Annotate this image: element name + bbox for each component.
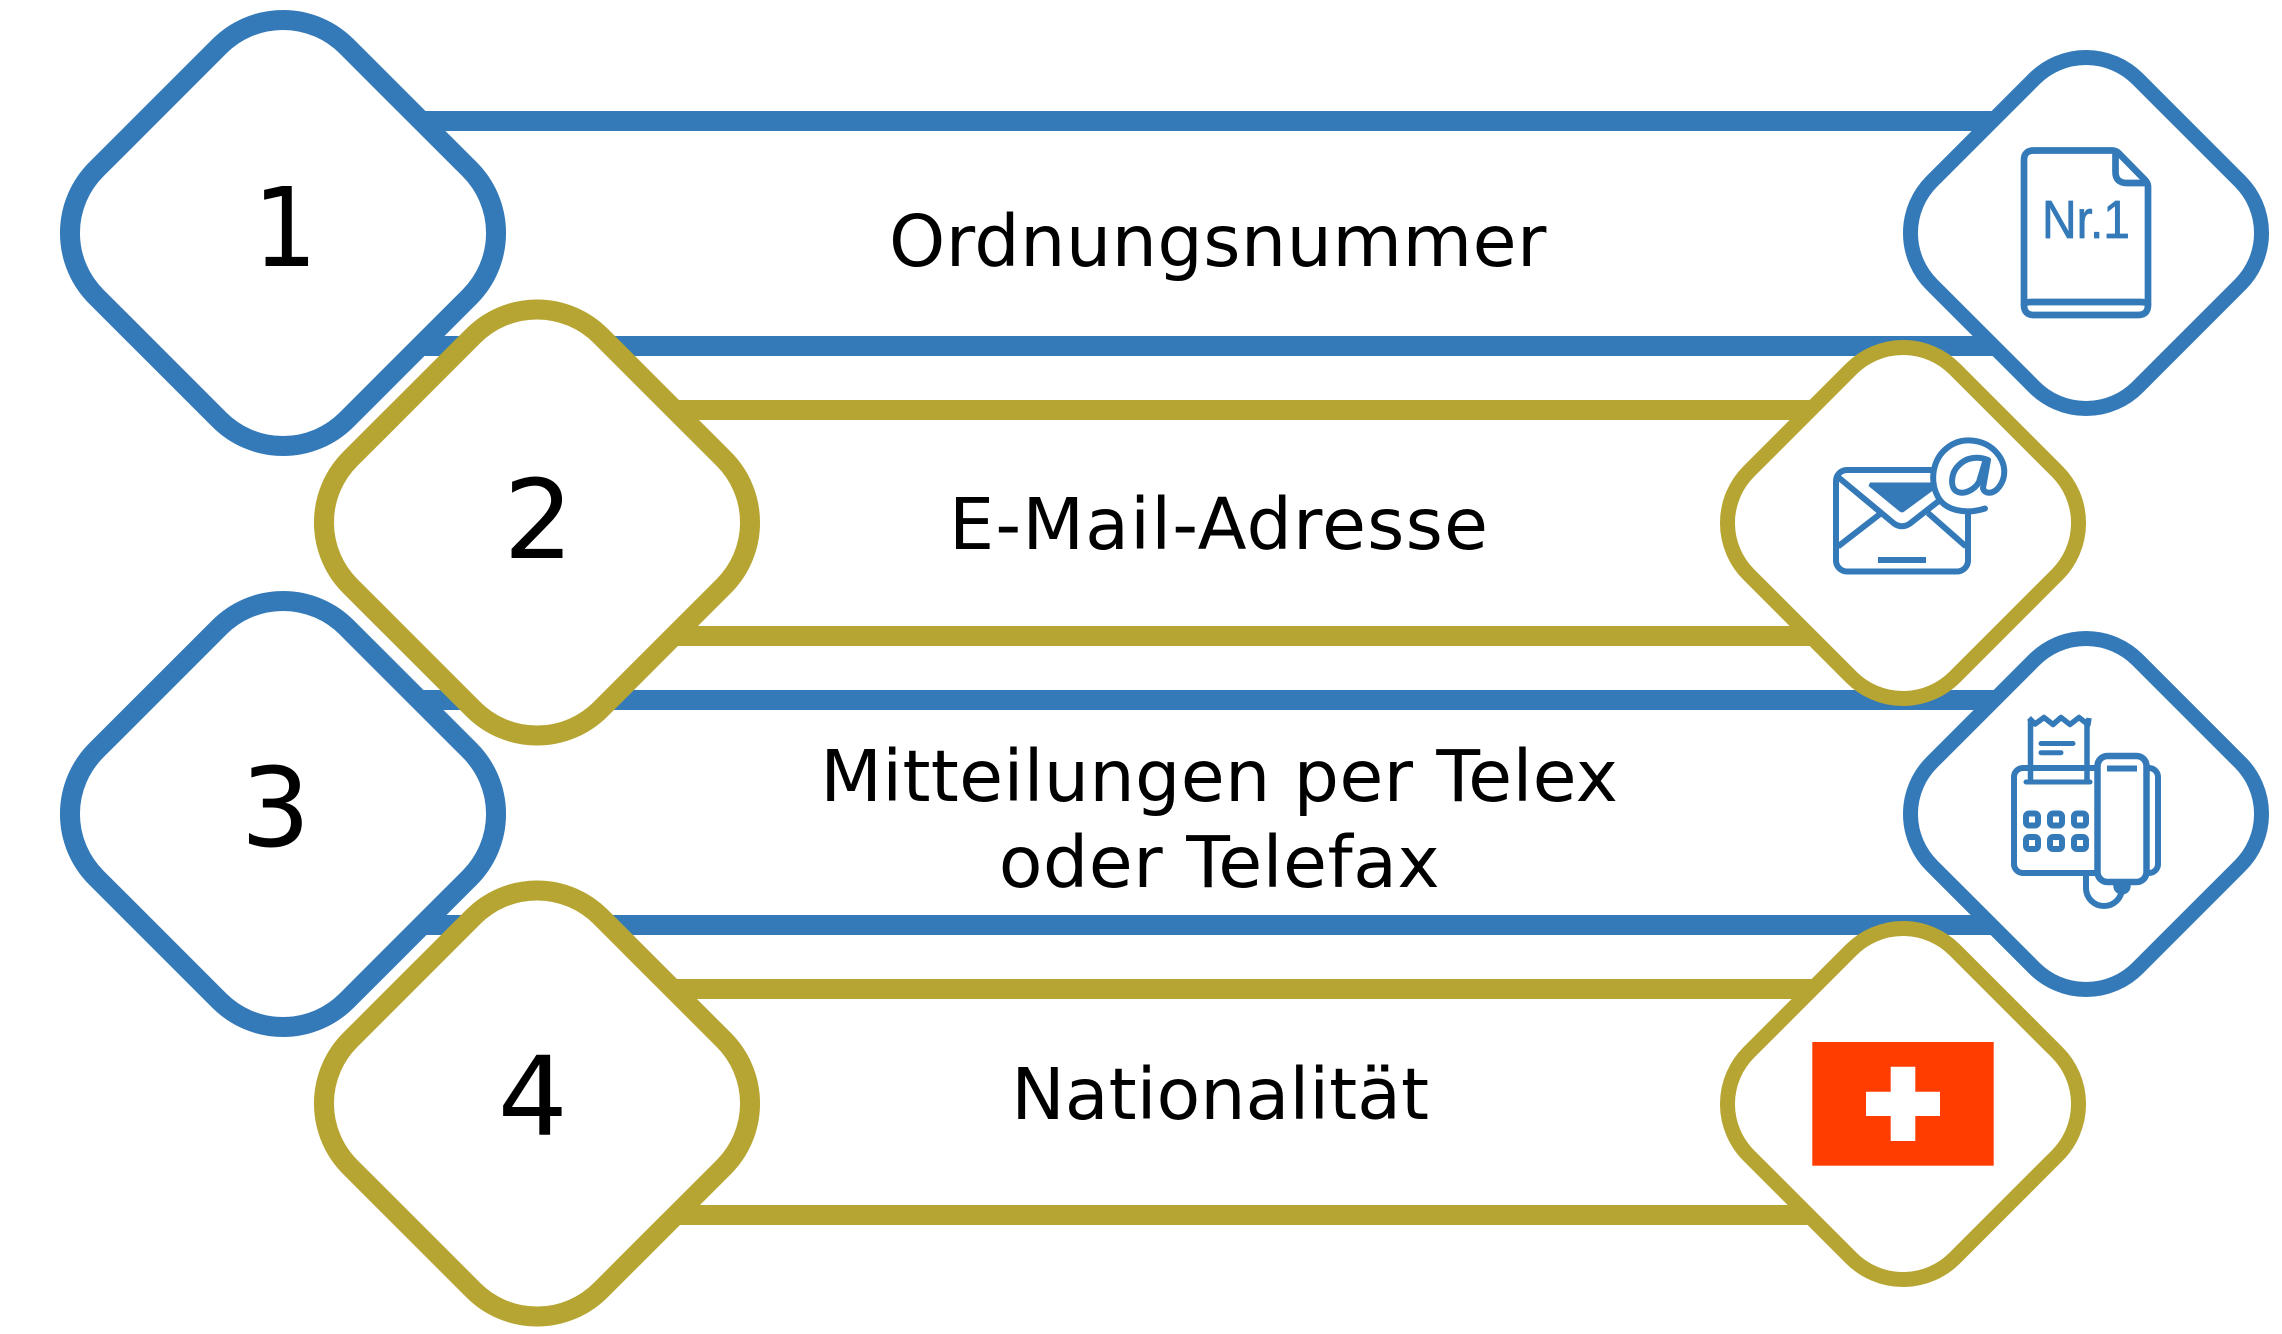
icon diamond 3 bbox=[1880, 608, 2282, 1020]
icon diamond 4 bbox=[1697, 898, 2109, 1310]
label: E-Mail-Adresse: E-Mail-Adresse bbox=[949, 483, 1488, 566]
row 4 bars bbox=[537, 979, 1903, 1225]
row 3 bars bbox=[283, 690, 2086, 935]
number diamond 2 bbox=[287, 272, 787, 773]
label: Mitteilungen per Telex oder Telefax: Mitteilungen per Telex bbox=[820, 735, 1618, 818]
row 2 bars bbox=[537, 400, 1903, 646]
icon: numbered document bbox=[2024, 150, 2148, 315]
label: Ordnungsnummer: Ordnungsnummer bbox=[889, 200, 1547, 283]
row 1: Ordnungsnummer bbox=[33, 0, 2282, 483]
icon: fax machine bbox=[2014, 718, 2158, 906]
label: Mitteilungen per Telex oder Telefax: oder Telefax bbox=[999, 821, 1440, 904]
label: Nationalität: Nationalität bbox=[1011, 1053, 1429, 1136]
icon: numbered document: Nr.1 bbox=[2042, 190, 2130, 250]
label: Mitteilungen per Telex oder Telefax bbox=[820, 735, 1618, 904]
number 2: 2 bbox=[504, 456, 574, 584]
number diamond 3 bbox=[33, 564, 533, 1064]
row 3: Mitteilungen per Telex oder Telefax bbox=[33, 564, 2282, 1064]
icon diamond 1 bbox=[1880, 27, 2282, 439]
icon diamond 2 bbox=[1697, 317, 2109, 729]
number 4: 4 bbox=[498, 1033, 568, 1161]
number 1: 1 bbox=[253, 164, 317, 292]
icon: Swiss flag bbox=[1812, 1042, 1994, 1166]
number diamond 1 bbox=[33, 0, 533, 483]
row 2: E-Mail-Adresse bbox=[287, 272, 2109, 773]
number 3: 3 bbox=[241, 744, 311, 872]
row 4: Nationalität bbox=[287, 853, 2109, 1334]
number diamond 4 bbox=[287, 853, 787, 1334]
row 1 bars bbox=[283, 111, 2086, 356]
icon: envelope with at sign bbox=[1836, 440, 2005, 572]
